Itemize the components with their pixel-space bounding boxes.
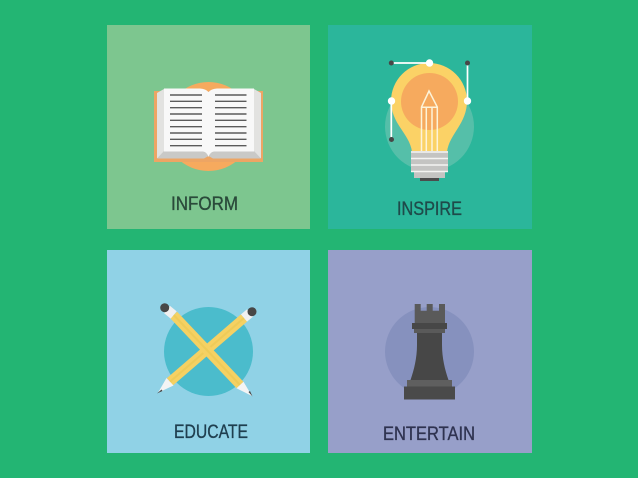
- label: educate: EDUCATE: [174, 422, 248, 443]
- panel: entertain: [328, 250, 532, 453]
- pencil: right top to left bottom: [157, 307, 256, 394]
- panel: educate: [107, 250, 310, 453]
- pencil: left top to right bottom: [160, 303, 252, 396]
- panel: inspire: [328, 25, 532, 229]
- label: entertain: ENTERTAIN: [383, 424, 475, 445]
- label: inform: INFORM: [171, 194, 238, 215]
- icon: open book: [154, 82, 263, 171]
- text lines: [170, 95, 246, 146]
- icon: crossed pencils: [157, 303, 256, 396]
- label: inspire: INSPIRE: [397, 199, 462, 220]
- icon: light bulb with pencil: [385, 59, 474, 181]
- pencil: [422, 91, 437, 151]
- screw base: [411, 151, 448, 172]
- connector lines and nodes: [391, 63, 468, 139]
- icon: chess rook: [385, 304, 474, 400]
- panel: inform: [107, 25, 310, 229]
